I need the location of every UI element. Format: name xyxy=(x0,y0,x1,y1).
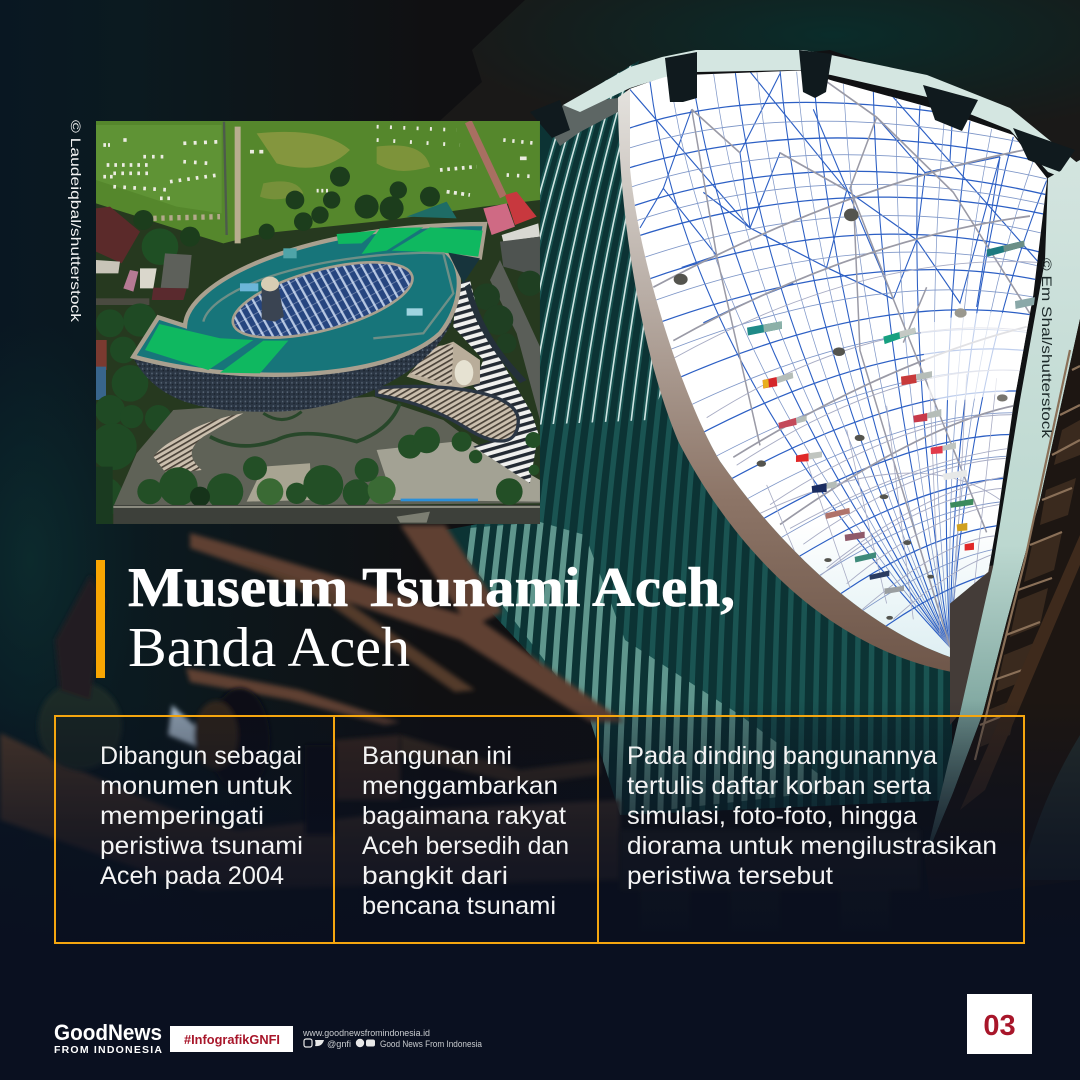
brown skylight rim xyxy=(618,89,950,672)
pocket beside skylight tip xyxy=(950,565,995,725)
column 2 text: bencana tsunami xyxy=(362,892,556,920)
website and social handles xyxy=(302,1028,482,1049)
credit: interior photo: © Em Shal/shutterstock xyxy=(1039,258,1055,439)
right scaffolding xyxy=(925,319,1080,900)
credit: aerial photo: © Laudeiqbal/shutterstock xyxy=(68,120,84,323)
column 3 text: simulasi, foto-foto, hingga xyxy=(627,802,917,830)
heading accent bar xyxy=(96,560,105,678)
page number: 03 xyxy=(983,1010,1016,1042)
website and social handles: @gnfi xyxy=(327,1039,351,1049)
right glass wall xyxy=(925,160,1080,860)
icon: youtube xyxy=(366,1040,375,1046)
icon: twitter xyxy=(315,1040,324,1046)
column 2 text: Aceh bersedih dan xyxy=(362,832,569,860)
info table xyxy=(55,716,1024,943)
black roof brackets xyxy=(530,50,1075,172)
lower panels in boxes xyxy=(335,735,400,800)
lower left brown beams xyxy=(186,525,625,785)
pale top beam xyxy=(563,50,1080,185)
glass oval dome xyxy=(232,261,414,339)
building facade xyxy=(134,315,454,412)
curved parapet wall xyxy=(0,733,620,890)
column 1 text: memperingati xyxy=(100,802,264,830)
cone tower xyxy=(262,285,284,322)
teal fin wall xyxy=(430,50,970,830)
grass field xyxy=(96,121,540,243)
column 1 text xyxy=(100,742,303,890)
column 1 text: peristiwa tsunami xyxy=(100,832,303,860)
column 3 text: tertulis daftar korban serta xyxy=(627,772,931,800)
bottom trees xyxy=(137,427,541,510)
column 2 text: menggambarkan xyxy=(362,772,558,800)
column 2 text: bangkit dari xyxy=(362,862,508,890)
column 1 text: monumen untuk xyxy=(100,772,293,800)
window and visitors xyxy=(38,575,335,835)
green roof panels xyxy=(145,227,483,373)
left houses xyxy=(96,207,140,263)
palm trees xyxy=(133,167,440,265)
column 3 text: peristiwa tersebut xyxy=(627,862,833,890)
icon: facebook xyxy=(356,1039,364,1047)
hashtag label: #InfografikGNFI xyxy=(184,1032,280,1047)
lower right dim wall xyxy=(1020,735,1080,880)
logo: GoodNews From Indonesia xyxy=(54,1020,162,1056)
stage and zebra stairs xyxy=(453,280,538,483)
right red roofs xyxy=(483,203,515,235)
column 2 text: Bangunan ini xyxy=(362,742,512,770)
column 3 text: diorama untuk mengilustrasikan xyxy=(627,832,997,860)
paths in the field xyxy=(234,126,241,244)
graves xyxy=(103,127,537,198)
website and social handles: www.goodnewsfromindonesia.id xyxy=(302,1028,430,1038)
dark arch ceiling xyxy=(430,0,1080,175)
hanging flags xyxy=(747,241,1035,594)
dark triangle at roof end xyxy=(448,253,480,283)
curved striped ramp xyxy=(377,386,518,441)
bottom dark fade xyxy=(0,700,1080,955)
title xyxy=(128,557,735,679)
title: Banda Aceh xyxy=(128,617,410,679)
front road xyxy=(113,505,540,524)
gray wedge at beam end xyxy=(546,98,618,146)
column 2 text: bagaimana rakyat xyxy=(362,802,566,830)
icon: instagram xyxy=(304,1039,312,1047)
title: Museum Tsunami Aceh, xyxy=(128,557,735,619)
roof units xyxy=(407,308,423,316)
logo: GoodNews From Indonesia: FROM INDONESIA xyxy=(54,1044,162,1056)
plaza xyxy=(113,397,540,507)
skylight lattice roof xyxy=(630,70,1048,657)
aerial photo of the museum xyxy=(83,121,543,524)
left trees xyxy=(96,303,170,514)
dim lower gallery xyxy=(620,830,920,930)
hashtag label xyxy=(170,1026,293,1052)
page number xyxy=(967,994,1032,1054)
lamps xyxy=(674,209,1008,620)
column 1 text: Aceh pada 2004 xyxy=(100,862,284,890)
column 1 text: Dibangun sebagai xyxy=(100,742,302,770)
glare xyxy=(920,313,1033,400)
sign xyxy=(401,499,478,501)
right trees and road xyxy=(490,260,540,420)
teal roof xyxy=(133,224,485,375)
inner roof walls xyxy=(203,253,453,338)
brown right diagonal beam xyxy=(960,535,1080,810)
column 3 text: Pada dinding bangunannya xyxy=(627,742,937,770)
logo: GoodNews From Indonesia: GoodNews xyxy=(54,1020,162,1045)
column 2 text xyxy=(362,742,569,920)
column 3 text xyxy=(627,742,997,890)
website and social handles: Good News From Indonesia xyxy=(380,1039,482,1049)
